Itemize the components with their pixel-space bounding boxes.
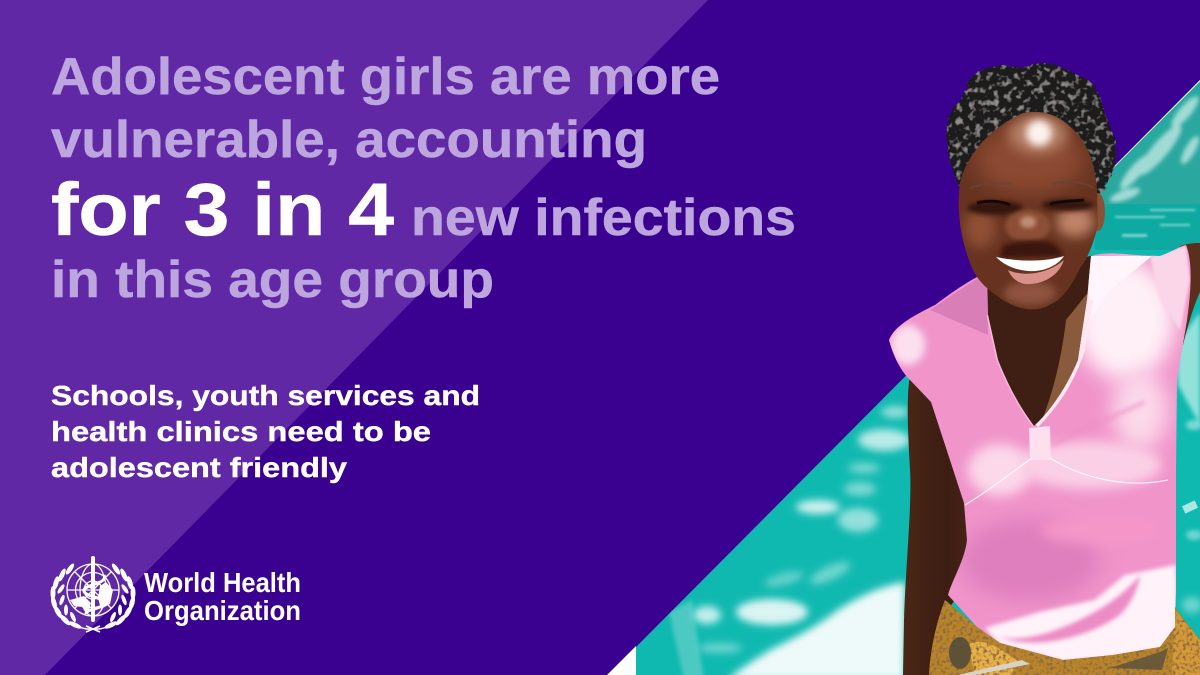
hair — [947, 63, 1116, 205]
thin white edge — [1114, 80, 1200, 168]
headline line 4: in this age group — [51, 251, 494, 309]
white corner triangle — [607, 646, 636, 675]
left arm — [903, 375, 977, 675]
right edge highlights — [1176, 312, 1200, 425]
right arm — [1176, 243, 1200, 345]
wordmark — [144, 567, 301, 626]
light lower band — [985, 565, 1178, 662]
staff and serpent — [91, 558, 95, 620]
gathered knot — [1029, 426, 1051, 460]
sunlight patches — [693, 406, 910, 653]
neck and chest — [975, 255, 1095, 435]
nose — [1005, 210, 1051, 242]
laurel wreath — [50, 562, 136, 630]
collar left — [930, 278, 988, 335]
continents — [70, 582, 113, 613]
subheading line 3: adolescent friendly — [51, 452, 347, 483]
globe — [67, 564, 119, 616]
eye sockets — [967, 201, 1023, 215]
ear — [1091, 193, 1105, 231]
shirt — [880, 240, 1200, 670]
upper right foliage — [1090, 80, 1200, 205]
photo: smiling girl — [880, 63, 1200, 675]
light purple diagonal panel — [0, 0, 708, 675]
headline line 2: vulnerable, accounting — [51, 111, 647, 169]
brows — [970, 183, 1012, 188]
wordmark: World Health — [144, 567, 301, 598]
skirt — [925, 595, 1200, 675]
headline line 3 continuation: new infections — [411, 189, 796, 247]
subheading — [51, 380, 480, 483]
WHO logo — [50, 558, 301, 632]
icon: WHO emblem — [50, 558, 136, 632]
face — [958, 112, 1098, 310]
headline — [51, 48, 796, 309]
teal photo background — [630, 70, 1200, 675]
subheading line 2: health clinics need to be — [51, 416, 431, 447]
subheading line 1: Schools, youth services and — [51, 380, 480, 411]
upper sleeve highlight — [891, 325, 925, 365]
headline line 1: Adolescent girls are more — [51, 48, 720, 106]
seams — [965, 458, 1032, 505]
wordmark: Organization — [144, 595, 301, 626]
mouth — [996, 256, 1064, 271]
collar right — [1088, 256, 1152, 320]
neckline trim — [1036, 300, 1090, 425]
upper lip shadow — [1000, 241, 1064, 258]
eyes — [977, 201, 1010, 205]
headline line 3 emphasis: for 3 in 4 — [51, 168, 394, 251]
